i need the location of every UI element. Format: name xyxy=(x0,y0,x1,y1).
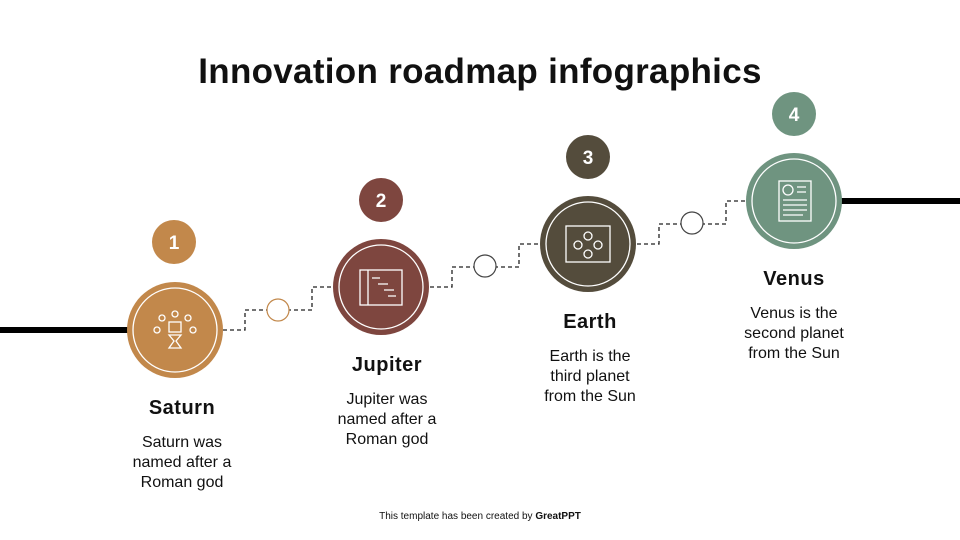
Jupiter text xyxy=(338,354,436,448)
waypoint circles xyxy=(267,212,703,321)
step 1 circle xyxy=(127,220,223,378)
step 3 circle xyxy=(540,135,636,292)
step 4 circle xyxy=(746,92,842,249)
Earth text: Earth is the third planet from the Sun xyxy=(544,348,636,405)
step 3 circle: 3 xyxy=(583,148,593,169)
Earth text: Earth xyxy=(563,311,617,333)
step 2 circle xyxy=(333,178,429,335)
Venus text: Venus is the second planet from the Sun xyxy=(744,305,844,362)
Earth text xyxy=(544,311,636,405)
Saturn text: Saturn was named after a Roman god xyxy=(133,434,231,491)
footer: This template has been created by GreatPPT xyxy=(379,511,581,522)
line: right xyxy=(840,198,960,204)
Venus text: Venus xyxy=(763,268,825,290)
Jupiter text: Jupiter xyxy=(352,354,422,376)
Saturn text: Saturn xyxy=(149,397,215,419)
step 2 circle: 2 xyxy=(376,191,386,212)
line: left xyxy=(0,327,130,333)
title: Innovation roadmap infographics xyxy=(198,52,762,91)
dashed connectors xyxy=(223,201,747,330)
step 4 circle: 4 xyxy=(789,105,800,126)
Saturn text xyxy=(133,397,232,491)
step 1 circle: 1 xyxy=(169,233,180,254)
Jupiter text: Jupiter was named after a Roman god xyxy=(338,391,436,448)
Venus text xyxy=(744,268,844,362)
